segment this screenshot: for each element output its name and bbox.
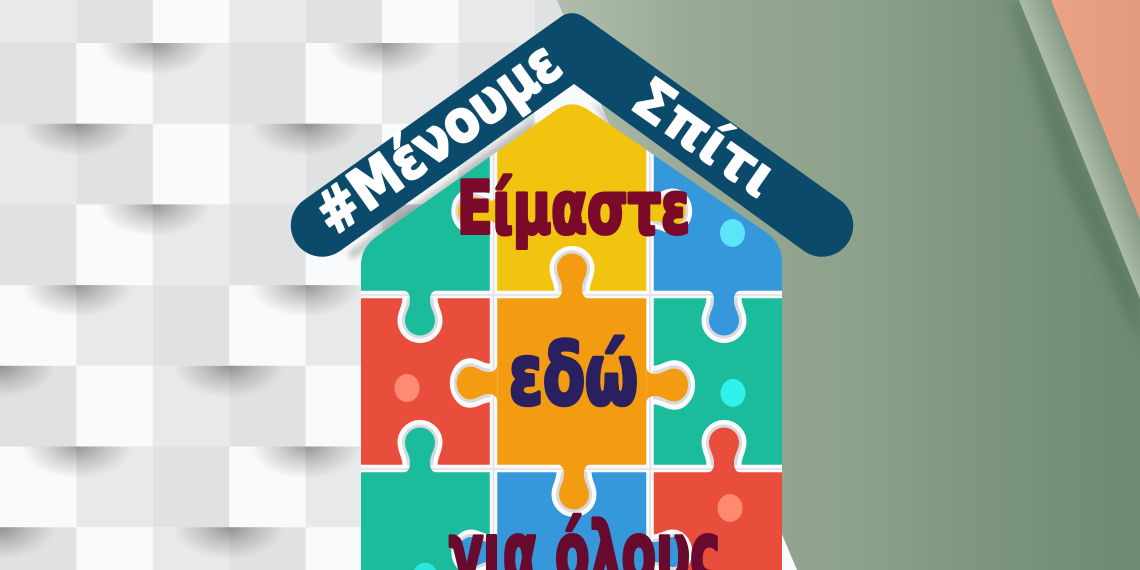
heading: εδώ: εδώ <box>509 326 638 424</box>
fold shadow beside strip <box>1010 0 1140 345</box>
salmon corner <box>1051 0 1140 220</box>
light green fold strip <box>1019 0 1140 299</box>
roof text: Σπίτι: Σπίτι <box>620 65 788 210</box>
puzzle dots <box>394 219 746 570</box>
roof band <box>291 13 853 257</box>
puzzle tiles <box>355 90 790 570</box>
puzzle knob outlines <box>405 196 739 567</box>
puzzle joint lines <box>361 150 782 570</box>
heading: Είμαστε: Είμαστε <box>457 166 690 250</box>
roof text: #Μένουμε: #Μένουμε <box>302 28 573 248</box>
panel: green diagonal background <box>557 0 1140 570</box>
house puzzle <box>355 90 790 570</box>
roof drop shadow <box>350 100 625 256</box>
puzzle knob fills <box>403 194 741 569</box>
